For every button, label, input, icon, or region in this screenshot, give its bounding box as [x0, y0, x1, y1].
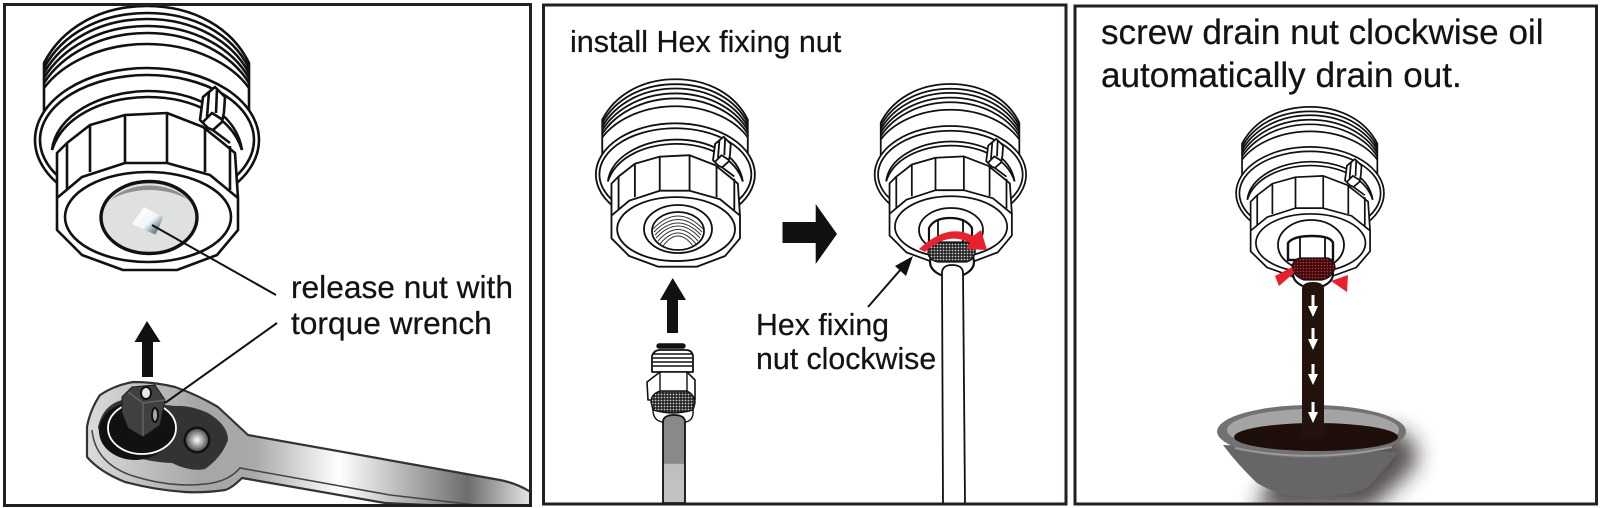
- icon: loose fitting and tube: [647, 344, 695, 503]
- arrow: up: [134, 321, 160, 377]
- heading: screw drain nut clockwise: screw drain nut clockwise oil: [1101, 13, 1544, 52]
- oil tube: [1302, 282, 1324, 436]
- wrench dark head: [98, 400, 228, 470]
- red rotation arrow clockwise: [919, 230, 987, 252]
- white flow arrows: [1308, 295, 1318, 423]
- label: Hex fixing nut clockwise: nut clockwise: [756, 343, 936, 376]
- arrow: right: [782, 204, 837, 264]
- label: release nut with torque wrench: torque wrench: [291, 305, 492, 341]
- panel: step 3 drain oil: [1075, 6, 1596, 508]
- bowl with oil: [1217, 405, 1418, 508]
- red rotation arrow: [1275, 267, 1348, 292]
- heading: install Hex fixing nut: install Hex fixing nut: [570, 25, 842, 59]
- panel: step 1 release nut: [4, 4, 535, 508]
- arrow: up into hole: [660, 278, 686, 333]
- heading: screw drain nut clockwise: automatically drain out.: [1101, 56, 1462, 95]
- cap with square nut: [35, 6, 259, 270]
- label: Hex fixing nut clockwise: Hex fixing: [756, 309, 889, 342]
- cap with fitting and tube: [875, 84, 1026, 503]
- label: release nut with torque wrench: release nut with: [291, 269, 513, 305]
- callout arrow: hex fixing nut: [868, 256, 913, 307]
- leader line: to nut: [152, 225, 276, 295]
- icon: ratchet wrench: [87, 382, 535, 508]
- leader line: to wrench: [165, 323, 277, 403]
- panel: step 2 install hex fixing nut: [544, 5, 1066, 504]
- cap with threaded hole: [596, 79, 755, 267]
- cap with fitting: [1236, 107, 1384, 288]
